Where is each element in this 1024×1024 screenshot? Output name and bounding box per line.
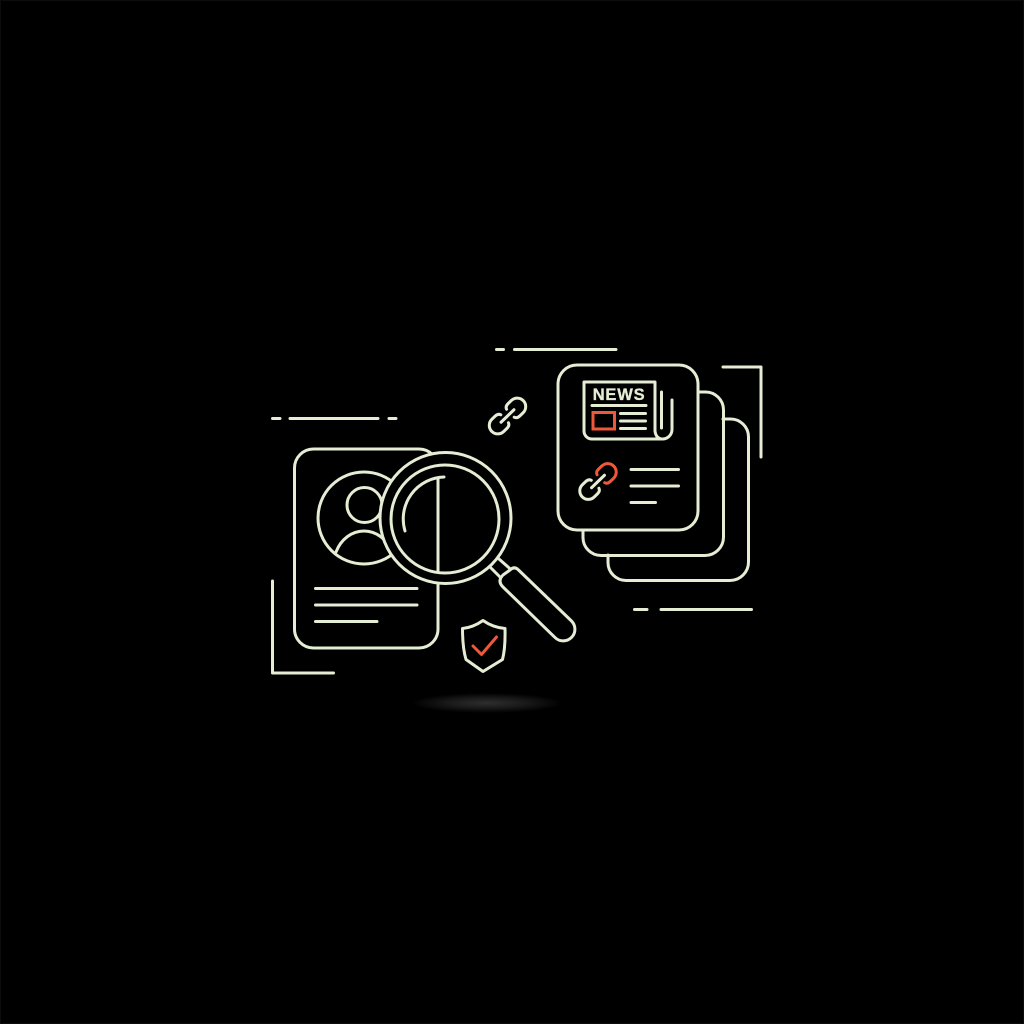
newspaper page [584,382,672,439]
back document [608,419,748,580]
lens outer ring [380,452,511,584]
icon: newspaper [584,382,672,439]
front document [558,365,698,530]
icon: red and cream chain link [576,460,620,503]
column lines [620,414,646,428]
shield outline [462,620,505,672]
panel: profile document [294,449,438,648]
newspaper headline: NEWS [593,386,645,404]
text lines [316,588,417,622]
panel: document stack [558,365,748,580]
magnifier handle [500,568,575,641]
text lines [631,470,678,502]
illustration [272,350,761,673]
icon: magnifying glass [380,452,575,641]
headline rule [592,404,646,407]
lens inner ring [391,465,499,573]
lens highlight [403,477,444,531]
corner bracket: top right [723,367,761,457]
red image box [593,412,614,429]
dashes: top left [272,417,396,420]
dashes: bottom right [634,608,752,611]
document edge through lens [436,478,440,571]
icon: shield with check [462,620,505,672]
dashes: top right [496,348,616,351]
middle document [583,392,724,556]
corner bracket: bottom left [272,581,334,673]
check mark [473,637,496,654]
avatar shoulders [336,531,392,552]
icon: chain link [486,395,529,437]
magnifier neck [490,559,512,580]
document outline [294,449,438,648]
avatar circle [318,472,410,564]
ground shadow [411,693,563,713]
avatar head [347,488,382,522]
